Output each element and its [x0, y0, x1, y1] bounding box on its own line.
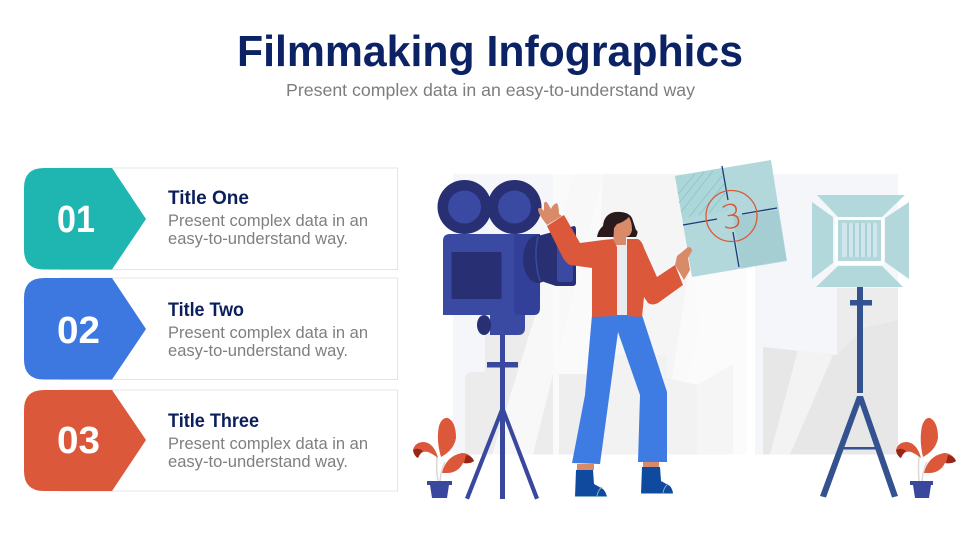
shirt [616, 245, 628, 315]
ankles [577, 462, 659, 470]
countdown ring [706, 190, 757, 242]
panel: step 01 [24, 168, 398, 270]
description 01: Present complex data in an [168, 212, 368, 230]
left boot [575, 470, 607, 497]
viewfinder [452, 252, 502, 299]
panel: step 03 [24, 390, 398, 491]
badge 01 [24, 168, 146, 270]
right boot [641, 467, 673, 494]
boot soles [575, 484, 673, 496]
title: Filmmaking Infographics [237, 27, 743, 76]
leaves [896, 418, 956, 473]
backdrop: studio window and skyline [453, 174, 898, 454]
knob [477, 315, 491, 335]
tripod: camera stand [465, 330, 539, 500]
panel: step 02 [24, 278, 398, 380]
number 03: 03 [57, 420, 100, 462]
description 02 [168, 324, 368, 360]
icon: right plant [896, 418, 956, 498]
left hand [538, 202, 562, 225]
description 02: Present complex data in an [168, 324, 368, 342]
icon: film camera [438, 180, 576, 335]
leaves [413, 418, 474, 473]
heading: Title Three: Title Three [168, 411, 259, 432]
icon: studio light [812, 195, 909, 287]
icon: left plant [413, 418, 474, 498]
crosshair lines [683, 166, 777, 267]
description 03 [168, 435, 368, 471]
lens hood [538, 226, 576, 286]
pot [427, 481, 452, 498]
slate board with number 3 [675, 160, 787, 277]
number 01: 01 [57, 199, 95, 241]
pot [910, 481, 933, 498]
trousers [572, 315, 667, 464]
description 01: easy-to-understand way. [168, 230, 348, 248]
board shading [733, 210, 786, 268]
number 02: 02 [57, 310, 100, 352]
subtitle: Present complex data in an easy-to-understand way [286, 80, 695, 100]
countdown numeral: 3 [718, 196, 745, 237]
description 01 [168, 212, 368, 248]
heading: Title Two: Title Two [168, 300, 244, 321]
description 03: Present complex data in an [168, 435, 368, 453]
heading: Title One: Title One [168, 188, 249, 209]
jacket [547, 215, 617, 317]
figure: woman presenting [538, 202, 692, 497]
hair [597, 212, 638, 237]
film reels [438, 180, 542, 234]
badge 03 [24, 390, 146, 491]
hatched corner [675, 168, 728, 219]
badge 02 [24, 278, 146, 380]
description 03: easy-to-understand way. [168, 453, 348, 471]
face and neck [613, 217, 632, 247]
lens barrel [523, 235, 553, 283]
light panel [838, 220, 881, 261]
camera body [443, 234, 525, 335]
description 02: easy-to-understand way. [168, 342, 348, 360]
stand: studio light [820, 287, 898, 498]
right hand [675, 247, 692, 280]
